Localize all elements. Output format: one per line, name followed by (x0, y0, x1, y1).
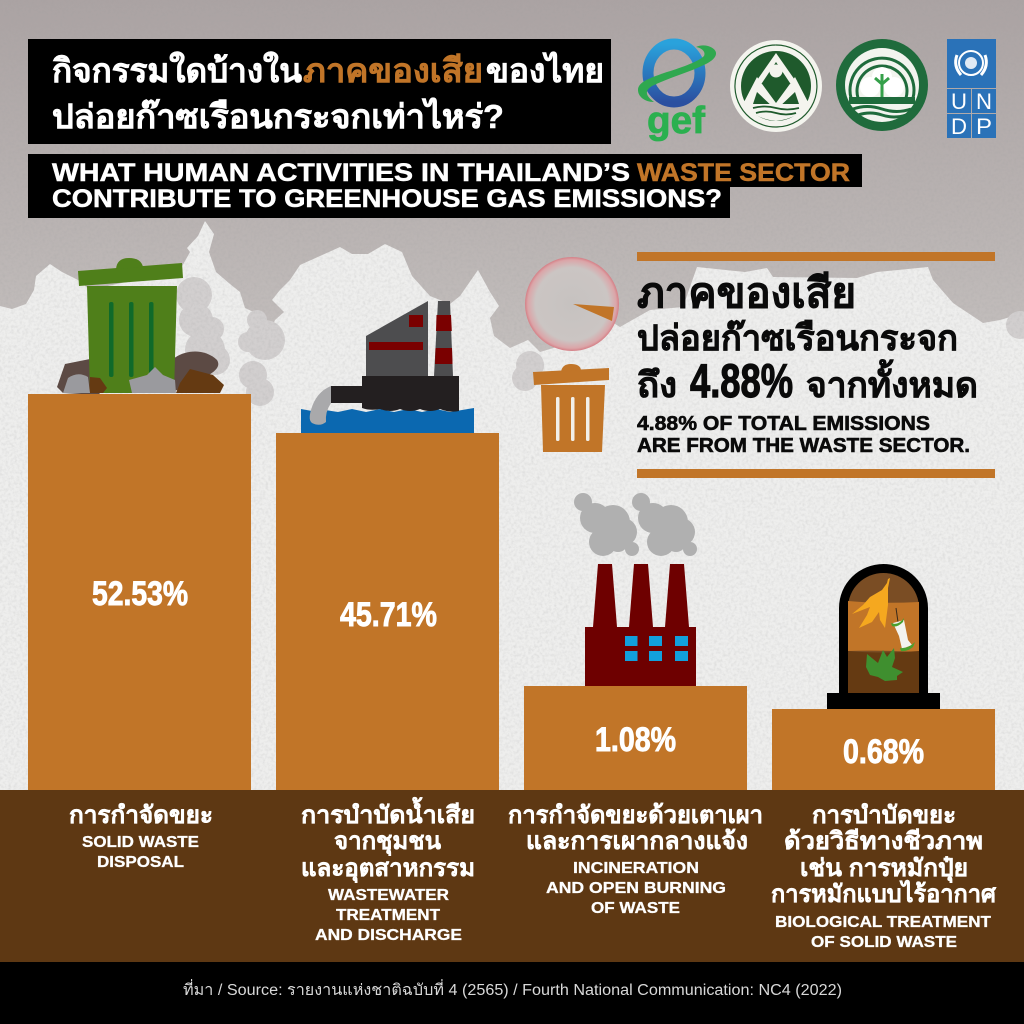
icon: gauge 4.88 percent (525, 257, 619, 351)
title: Thai heading: ภาคของเสีย (303, 52, 483, 89)
label: wastewater treatment and discharge: AND DISCHARGE (315, 927, 462, 944)
background: paper texture (0, 0, 1024, 800)
logo: UNDP: N (976, 89, 992, 114)
label: solid waste disposal: การกำจัดขยะ (69, 802, 213, 829)
chart: bar incineration and open burning (524, 686, 747, 790)
label: incineration and open burning of waste: INCINERATION (573, 860, 699, 877)
icon: incinerator factory with smoke (574, 493, 697, 686)
title: Thai heading: กิจกรรมใดบ้างใน (52, 51, 302, 89)
callout: 4.88 percent statement: ปล่อยก๊าซเรือนกระจก (637, 319, 958, 358)
title: English heading: WHAT HUMAN ACTIVITIES IN THAILAND’S (52, 159, 630, 187)
callout: 4.88 percent statement: 4.88% (690, 354, 793, 407)
chart: bar wastewater treatment: 45.71% (340, 596, 437, 634)
logo: GEF (638, 44, 716, 142)
panel: category label band (0, 790, 1024, 962)
callout: 4.88 percent statement: ARE FROM THE WASTE SECTOR. (637, 435, 970, 457)
label: solid waste disposal (69, 802, 213, 871)
chart: bar biological treatment: 0.68% (843, 733, 924, 771)
label: solid waste disposal: SOLID WASTE (82, 834, 199, 851)
label: incineration and open burning of waste (508, 802, 763, 917)
label: biological treatment of solid waste: BIOLOGICAL TREATMENT (775, 914, 991, 931)
label: incineration and open burning of waste: AND OPEN BURNING (546, 880, 726, 897)
chart: bar wastewater treatment (276, 433, 499, 790)
chart: bar solid waste disposal: 52.53% (92, 575, 188, 613)
chart: bar solid waste disposal (28, 394, 251, 790)
title: English heading: CONTRIBUTE TO GREENHOUSE GAS EMISSIONS? (52, 185, 722, 213)
logo: natural resources office seal (730, 40, 822, 132)
label: biological treatment of solid waste: การบำบัดขยะ (812, 802, 956, 829)
label: biological treatment of solid waste: การหมักแบบไร้อากาศ (771, 879, 997, 908)
chart: bar incineration and open burning: 1.08% (595, 721, 676, 759)
title: Thai heading: ปล่อยก๊าซเรือนกระจกเท่าไหร่? (52, 97, 504, 135)
label: biological treatment of solid waste: ด้วยวิธีทางชีวภาพ (784, 828, 983, 855)
title: English heading (28, 154, 862, 218)
background: grey smoke puffs (176, 277, 1024, 406)
label: wastewater treatment and discharge: WASTEWATER (328, 887, 449, 904)
icon: wastewater factory (301, 301, 474, 433)
label: wastewater treatment and discharge: TREATMENT (336, 907, 440, 924)
title: Thai heading: ของไทย (486, 51, 604, 89)
label: wastewater treatment and discharge: และอุตสาหกรรม (301, 855, 475, 884)
label: biological treatment of solid waste: OF SOLID WASTE (811, 934, 957, 951)
label: wastewater treatment and discharge: การบำบัดน้ำเสีย (301, 796, 475, 829)
label: wastewater treatment and discharge: จากชุมชน (334, 828, 442, 857)
icon: green trash can with rubbish (57, 258, 224, 395)
label: biological treatment of solid waste: เช่น การหมักปุ๋ย (800, 855, 968, 884)
title: English heading: WASTE SECTOR (637, 159, 850, 187)
label: incineration and open burning of waste: การกำจัดขยะด้วยเตาเผา (508, 802, 763, 829)
logo: UNDP (947, 39, 996, 139)
icon: orange trash can (533, 364, 609, 452)
footer: source line (0, 962, 1024, 1024)
logo: UNDP: P (976, 114, 992, 139)
label: incineration and open burning of waste: และการเผากลางแจ้ง (526, 828, 748, 855)
callout: 4.88 percent statement: 4.88% OF TOTAL EMISSIONS (637, 413, 930, 435)
callout: 4.88 percent statement (637, 252, 995, 478)
icon: compost tombstone (827, 564, 940, 709)
logo: climate change department seal (836, 39, 928, 131)
callout: 4.88 percent statement: จากทั้งหมด (806, 359, 978, 405)
background: grey sky (0, 0, 1024, 420)
footer: source line: ที่มา / Source: รายงานแห่งชาติฉบับที่ 4 (2565) / Fourth National Communication: NC4 (2022) (183, 979, 842, 999)
callout: 4.88 percent statement: ถึง (637, 366, 677, 405)
chart: bar biological treatment (772, 709, 995, 790)
label: biological treatment of solid waste (771, 802, 997, 951)
label: solid waste disposal: DISPOSAL (97, 854, 184, 871)
label: incineration and open burning of waste: OF WASTE (591, 900, 680, 917)
label: wastewater treatment and discharge (301, 796, 475, 944)
logo: GEF: gef (647, 100, 705, 142)
logo: UNDP: U (951, 89, 967, 114)
background: white smoke cloud (0, 221, 1024, 800)
logo: UNDP: D (951, 114, 967, 139)
title: Thai heading (28, 39, 611, 144)
callout: 4.88 percent statement: ภาคของเสีย (637, 270, 856, 316)
